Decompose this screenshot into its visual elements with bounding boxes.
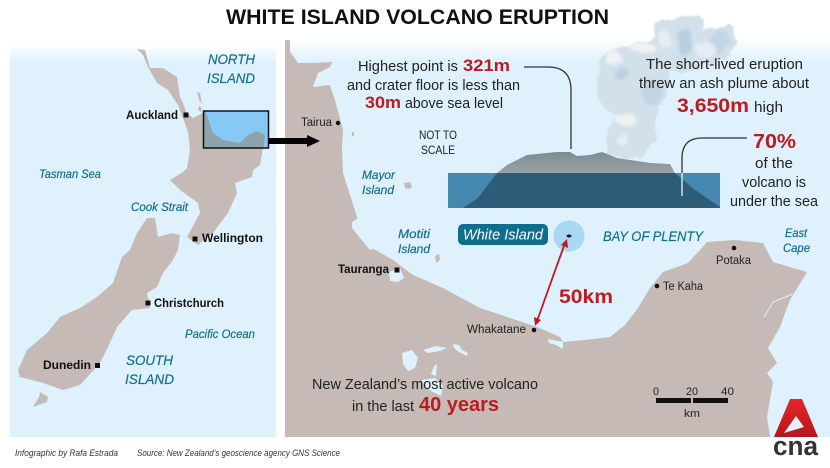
note: not to scale: SCALE [421, 145, 455, 157]
label: Tairua: Tairua [301, 117, 333, 129]
map: Mayor Island [404, 182, 412, 189]
map: North Island [137, 49, 265, 245]
scale bar [653, 386, 734, 420]
label: Mayor Island: Island [362, 185, 395, 197]
scale bar: 40 [721, 386, 734, 398]
label: 50km: 50km [559, 287, 613, 308]
label: White Island: White Island [463, 228, 544, 244]
scale bar: 0 [653, 386, 659, 398]
label: East Cape: Cape [783, 243, 810, 255]
callout: ash plume height: high [754, 99, 783, 116]
label: Potaka: Potaka [716, 255, 752, 267]
callout: highest point [347, 56, 520, 112]
callout: highest point: 30m [365, 93, 401, 112]
label: South Island: SOUTH [126, 352, 174, 368]
callout: most active volcano: 40 years [419, 394, 499, 416]
label: Te Kaha: Te Kaha [663, 281, 704, 293]
label: Whakatane: Whakatane [467, 324, 526, 336]
callout: 70 percent under the sea [730, 131, 819, 210]
map: coastal inlets and lakes [352, 218, 793, 396]
leader line: underwater share [682, 138, 747, 196]
callout: ash plume height [639, 56, 810, 117]
logo: CNA [773, 399, 819, 461]
label: Cook Strait: Cook Strait [131, 202, 189, 214]
scale bar: km [684, 408, 700, 420]
label: Motiti Island: Island [398, 244, 431, 256]
arrow: inset to detail map [269, 135, 320, 147]
callout: 70 percent under the sea: volcano is [742, 174, 806, 191]
label: Potaka [716, 246, 752, 267]
arrow: distance to Whakatane [534, 239, 568, 326]
note: not to scale: NOT TO [419, 130, 457, 142]
title: WHITE ISLAND VOLCANO ERUPTION [226, 6, 609, 29]
scale bar: 20 [686, 386, 698, 398]
panel: Bay of Plenty map [285, 38, 830, 437]
callout: 70 percent under the sea: of the [755, 155, 793, 172]
label: White Island [458, 224, 548, 245]
label: North Island [207, 51, 256, 86]
map: Coromandel fragments [197, 92, 202, 112]
label: Pacific Ocean: Pacific Ocean [185, 329, 255, 341]
label: North Island: NORTH [208, 51, 256, 67]
logo: CNA: cna [773, 431, 819, 461]
map: South Island [18, 218, 180, 390]
callout: most active volcano: in the last [352, 398, 415, 415]
map: Bay of Plenty land [285, 40, 807, 437]
note: not to scale [419, 130, 457, 157]
leader line: highest point [524, 67, 571, 149]
callout: ash plume height: The short-lived eruption [646, 56, 803, 73]
callout: highest point: 321m [463, 56, 510, 75]
callout: ash plume height: 3,650m [677, 96, 749, 117]
city: Auckland: Auckland [126, 110, 178, 122]
map: Stewart Island [33, 392, 48, 407]
map: small islet [352, 132, 354, 136]
callout: highest point: and crater floor is less than [347, 77, 520, 94]
map: Motiti Island [435, 254, 440, 263]
callout: most active volcano [312, 376, 538, 416]
callout: highest point: above sea level [405, 95, 503, 112]
label: Motiti Island [398, 229, 431, 256]
label: East Cape [783, 228, 810, 255]
panel: New Zealand overview map [10, 45, 276, 437]
city: Wellington: Wellington [202, 233, 263, 245]
illustration: ash plume [596, 15, 737, 157]
city: Dunedin: Dunedin [43, 360, 91, 372]
callout: highest point: Highest point is [358, 58, 458, 75]
city: Christchurch: Christchurch [154, 298, 224, 310]
callout: ash plume height: threw an ash plume about [639, 75, 810, 92]
label: Mayor Island: Mayor [362, 170, 396, 182]
credit: infographic author: Infographic by Rafa Estrada [15, 448, 118, 458]
illustration: volcano cross-section [448, 152, 720, 208]
label: East Cape: East [785, 228, 808, 240]
label: Motiti Island: Motiti [398, 229, 431, 241]
label: Mayor Island [362, 170, 396, 197]
callout: 70 percent under the sea: under the sea [730, 193, 819, 210]
locator box [202, 110, 270, 149]
callout: most active volcano: New Zealand’s most active volcano [312, 376, 538, 393]
label: Tasman Sea: Tasman Sea [39, 169, 101, 181]
label: North Island: ISLAND [207, 70, 255, 86]
callout: 70 percent under the sea: 70% [753, 131, 796, 153]
label: Bay of Plenty: BAY OF PLENTY [603, 228, 705, 244]
label: South Island: ISLAND [125, 371, 174, 387]
credit: source: Source: New Zealand’s geoscience agency GNS Science [137, 448, 340, 458]
marker: White Island location [554, 220, 584, 252]
label: Tauranga: Tauranga [338, 264, 390, 276]
label: South Island [125, 352, 174, 387]
